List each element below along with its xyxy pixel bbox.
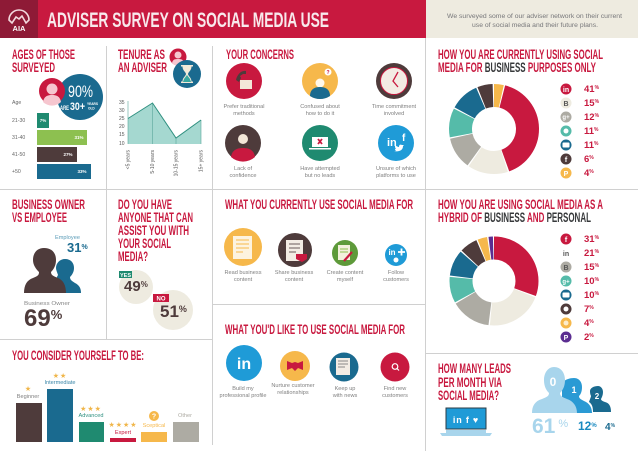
icon: share content <box>278 233 312 267</box>
value 61%: 61 <box>532 415 555 438</box>
heading <box>12 197 85 225</box>
panel: current uses <box>224 197 413 283</box>
no bubble: 51 <box>160 302 179 321</box>
icon: laptop: in f ♥ <box>453 415 479 425</box>
panel: leads <box>438 361 616 438</box>
heading: SOCIAL MEDIA? <box>438 388 499 403</box>
icon: clock <box>376 63 412 99</box>
legend <box>560 234 600 343</box>
icon: avatar with 90% badge: YEARS <box>87 102 98 106</box>
yes bubble: YES <box>120 273 131 279</box>
legend: % <box>595 277 600 283</box>
label: Keep up <box>335 386 355 392</box>
business owner label: Business Owner <box>24 301 70 307</box>
value 12%: % <box>591 423 597 429</box>
legend: % <box>595 85 600 91</box>
panel: hybrid use <box>438 197 603 343</box>
label: Find new <box>384 386 406 392</box>
icon: avatar with 90% badge: ARE <box>60 106 69 112</box>
panel: business owner vs employee <box>12 197 88 332</box>
bar chart: ★★ <box>53 372 67 380</box>
icon: social platforms: in <box>387 137 397 149</box>
legend: % <box>589 169 594 175</box>
legend: % <box>595 291 600 297</box>
icon: news <box>330 352 358 382</box>
age bar chart: 7% <box>40 118 46 123</box>
icon: avatar with 90% badge: 30+ <box>70 101 85 113</box>
legend: 10 <box>584 290 595 301</box>
bar chart: Beginner <box>17 394 39 400</box>
label: involved <box>384 111 404 117</box>
heading: ANYONE THAT CAN <box>118 210 193 225</box>
label: Read business <box>224 270 262 276</box>
panel: self-rating <box>12 348 199 442</box>
legend: 2 <box>584 332 589 343</box>
bar chart <box>16 372 199 442</box>
area chart: 20 <box>119 124 125 130</box>
heading: WHAT YOU CURRENTLY USE SOCIAL MEDIA FOR <box>225 197 413 212</box>
label: Time commitment <box>372 104 416 110</box>
label: Build my <box>232 386 254 392</box>
heading: VS EMPLOYEE <box>12 210 67 225</box>
person 0 figure <box>532 367 577 413</box>
legend: % <box>589 305 594 311</box>
legend: % <box>595 113 600 119</box>
icon: linkedin <box>226 345 262 381</box>
icon: confused person <box>302 63 338 99</box>
icon: read content <box>224 228 262 266</box>
employee label: Employee <box>55 235 80 241</box>
legend: B <box>563 101 569 108</box>
age bar chart: 41-50 <box>12 152 25 158</box>
digit labels: 0 <box>550 375 557 389</box>
panel: ages <box>12 47 103 179</box>
area chart: <5 years <box>126 150 132 169</box>
value 61%: % <box>558 418 568 430</box>
employee figure <box>56 259 81 293</box>
intro text panel: use of social media and their future plans. <box>472 22 598 29</box>
intro text panel: We surveyed some of our adviser network on their current <box>447 13 622 20</box>
value 4%: 4 <box>605 422 611 433</box>
bar chart: Advanced <box>79 413 103 419</box>
digit labels: 2 <box>595 392 600 401</box>
icon: confused person: ? <box>326 70 330 76</box>
legend: 4 <box>584 318 589 329</box>
heading <box>438 361 511 403</box>
panel: future uses <box>220 322 410 399</box>
heading line 2: HYBRID OF BUSINESS AND PERSONAL <box>438 210 591 225</box>
legend: in <box>563 251 569 258</box>
label: with news <box>332 393 357 399</box>
legend: in <box>563 87 569 94</box>
business owner value: 69 <box>24 305 51 332</box>
yes bubble <box>119 270 153 304</box>
heading <box>118 47 167 75</box>
no bubble: NO <box>156 296 166 302</box>
person 1 figure <box>562 378 592 413</box>
area chart: 30 <box>119 108 125 114</box>
label: Unsure of which <box>376 166 416 172</box>
heading: AN ADVISER <box>118 60 167 75</box>
icon: avatar with 90% badge: 90% <box>68 82 93 101</box>
area chart: 15 <box>119 132 125 138</box>
legend: f <box>565 155 568 164</box>
heading: YOUR SOCIAL <box>118 236 171 251</box>
icon: avatar with 90% badge: OLD <box>88 106 95 110</box>
label: Have attempted <box>300 166 340 172</box>
panel: your concerns <box>223 47 417 179</box>
label: relationships <box>277 390 309 396</box>
yes bubble: 49 <box>124 278 141 295</box>
heading <box>12 47 75 75</box>
heading <box>118 197 193 264</box>
legend: 11 <box>584 140 594 151</box>
legend: g+ <box>562 280 570 286</box>
person 2 figure <box>589 386 611 412</box>
heading: MEDIA? <box>118 249 148 264</box>
icon: social platforms <box>378 125 414 161</box>
area chart: 5-10 years <box>150 150 156 174</box>
icon: lack of confidence <box>225 125 261 162</box>
heading: AGES OF THOSE <box>12 47 75 62</box>
label: Prefer traditional <box>223 104 265 110</box>
heading: DO YOU HAVE <box>118 197 172 212</box>
legend: 15 <box>584 98 595 109</box>
legend: % <box>595 249 600 255</box>
label: Share business <box>275 270 313 276</box>
header banner <box>0 0 426 38</box>
bar chart: Sceptical <box>143 423 165 429</box>
legend: 15 <box>584 262 595 273</box>
bar chart: ★★★ <box>80 405 102 413</box>
bar chart: Intermediate <box>44 380 76 386</box>
label: Nurture customer <box>271 383 315 389</box>
bar chart: Other <box>178 413 192 419</box>
label: methods <box>233 111 255 117</box>
legend: 41 <box>584 84 595 95</box>
value 4%: % <box>611 423 616 429</box>
no bubble <box>153 290 193 330</box>
legend: 12 <box>584 112 595 123</box>
AIA logo: AIA <box>13 24 26 33</box>
label: how to do it <box>306 111 335 117</box>
bar chart: ★ <box>25 385 31 393</box>
age bar chart: 27% <box>63 152 73 157</box>
icon: avatar and hourglass <box>170 48 201 88</box>
label: Lack of <box>234 166 252 172</box>
legend: 6 <box>584 154 589 165</box>
legend: P <box>564 171 569 178</box>
area chart: 10-15 years <box>174 150 180 176</box>
legend: 11 <box>584 126 594 137</box>
heading: PER MONTH VIA <box>438 375 502 390</box>
legend: P <box>564 335 569 342</box>
bar chart: ★★★★ <box>108 421 138 429</box>
heading: SURVEYED <box>12 60 55 75</box>
legend: g+ <box>562 115 570 121</box>
legend <box>560 84 600 179</box>
label: content <box>234 277 253 283</box>
icon: social platforms: f <box>402 133 406 144</box>
panel: current business use <box>438 47 603 179</box>
panel: assistance <box>118 197 193 330</box>
employee value: 31 <box>67 240 81 255</box>
age bar chart: Age <box>12 100 21 106</box>
label: myself <box>337 277 354 283</box>
bar chart: ? <box>152 414 156 420</box>
business owner figure <box>24 248 66 293</box>
label: but no leads <box>305 173 335 179</box>
legend: % <box>594 127 599 133</box>
icon: search <box>380 352 410 382</box>
heading: YOU CONSIDER YOURSELF TO BE: <box>12 348 144 363</box>
digit labels <box>550 375 600 401</box>
legend: 4 <box>584 168 589 179</box>
icon: follow customers: in <box>388 248 396 257</box>
age bar chart: 21-30 <box>12 118 25 124</box>
area chart: 10 <box>119 141 125 147</box>
AIA logo <box>0 0 38 38</box>
icon: phone and letter <box>226 63 262 99</box>
legend: B <box>563 265 569 272</box>
heading: HOW MANY LEADS <box>438 361 511 376</box>
heading: WHAT YOU'D LIKE TO USE SOCIAL MEDIA FOR <box>225 322 405 337</box>
panel: tenure <box>118 47 204 176</box>
legend: f <box>565 235 568 244</box>
legend: % <box>589 319 594 325</box>
yes bubble: % <box>141 280 148 289</box>
age bar chart: 31% <box>74 135 84 140</box>
legend: % <box>595 99 600 105</box>
label: Create content <box>327 270 363 276</box>
icon: create content <box>332 240 358 266</box>
label: professional profile <box>220 393 266 399</box>
bar chart: Expert <box>115 430 132 436</box>
legend: % <box>589 155 594 161</box>
icon: avatar with 90% badge <box>39 74 103 120</box>
icon: linkedin: in <box>237 356 251 373</box>
value 12%: 12 <box>578 419 591 433</box>
age bar chart: +50 <box>12 169 21 175</box>
icon: laptop with cross <box>302 125 338 161</box>
legend: % <box>595 263 600 269</box>
title: ADVISER SURVEY ON SOCIAL MEDIA USE <box>47 8 329 32</box>
label: customers <box>383 277 409 283</box>
legend: 7 <box>584 304 589 315</box>
legend: 21 <box>584 248 595 259</box>
area chart: 35 <box>119 100 125 106</box>
area chart: 25 <box>119 116 125 122</box>
heading: BUSINESS OWNER <box>12 197 85 212</box>
heading: TENURE AS <box>118 47 165 62</box>
legend: 31 <box>584 234 595 245</box>
employee value: % <box>81 244 88 251</box>
legend: 10 <box>584 276 595 287</box>
donut chart <box>460 96 528 162</box>
no bubble: % <box>179 304 187 314</box>
heading: YOUR CONCERNS <box>226 47 294 62</box>
donut chart <box>461 248 527 314</box>
heading: ASSIST YOU WITH <box>118 223 189 238</box>
label: confidence <box>229 173 257 179</box>
label: customers <box>382 393 408 399</box>
icon: follow customers <box>385 244 407 266</box>
label: Follow <box>388 270 404 276</box>
digit labels: 1 <box>571 385 577 395</box>
icon: laptop <box>440 408 492 436</box>
area chart <box>119 100 204 176</box>
intro text panel <box>426 0 638 38</box>
label: content <box>285 277 304 283</box>
icon: handshake <box>280 351 310 381</box>
legend: % <box>594 141 599 147</box>
age bar chart <box>12 100 91 179</box>
label: platforms to use <box>376 173 416 179</box>
label: Confused about <box>300 104 340 110</box>
business owner value: % <box>51 307 63 322</box>
age bar chart: 31-40 <box>12 135 25 141</box>
legend: % <box>589 333 594 339</box>
legend: % <box>595 235 600 241</box>
age bar chart: 33% <box>77 169 87 174</box>
area chart: 15+ years <box>198 150 204 172</box>
